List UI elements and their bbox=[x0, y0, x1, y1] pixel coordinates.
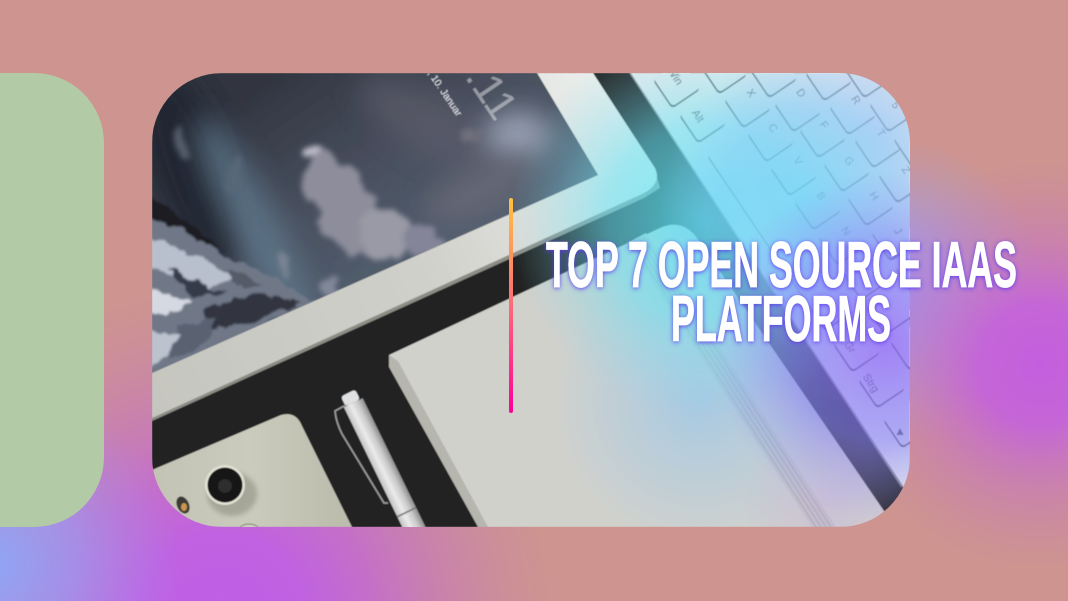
key labels: ▲ bbox=[894, 424, 906, 438]
phone flash bbox=[176, 496, 190, 514]
phone fingerprint sensor bbox=[238, 523, 260, 527]
key labels: Z bbox=[899, 164, 912, 177]
lock-screen clock: 7:11 bbox=[444, 36, 527, 128]
key labels: G bbox=[841, 154, 856, 168]
key labels: D bbox=[793, 87, 808, 100]
panel: rounded desk photo bbox=[152, 73, 910, 527]
key labels bbox=[664, 65, 912, 438]
key labels: 5 bbox=[889, 99, 902, 111]
smartphone bbox=[153, 413, 352, 527]
key labels: Alt bbox=[689, 108, 706, 125]
key labels: N bbox=[838, 225, 853, 238]
key labels: Gr bbox=[841, 339, 858, 356]
key labels: B bbox=[813, 190, 828, 203]
colour gradient overlay bbox=[520, 73, 910, 527]
clouds bbox=[171, 128, 482, 294]
snowy mountain bbox=[152, 197, 313, 372]
key labels: H bbox=[866, 190, 881, 203]
dark sky and light rays bbox=[152, 74, 564, 300]
key labels: F bbox=[817, 119, 830, 132]
key labels: T bbox=[874, 127, 887, 140]
key labels: Strg bbox=[860, 372, 881, 395]
title: PLATFORMS bbox=[671, 282, 891, 355]
title bbox=[546, 228, 1017, 355]
desk surface bbox=[152, 73, 910, 527]
key labels: V bbox=[790, 155, 805, 168]
tablet screen bbox=[152, 73, 598, 373]
lock-screen date: Mittwoch, 10. Januar bbox=[403, 36, 464, 119]
key labels: Win bbox=[664, 65, 685, 88]
key labels: R bbox=[848, 94, 863, 107]
phone camera bbox=[205, 465, 245, 505]
keyboard bbox=[629, 73, 910, 488]
key labels: C bbox=[765, 122, 780, 135]
tablet bbox=[152, 73, 660, 422]
panel: green side block bbox=[0, 73, 104, 527]
key labels: J bbox=[891, 226, 904, 237]
pen bbox=[333, 390, 426, 527]
notebook bbox=[389, 225, 895, 527]
keycaps bbox=[652, 45, 943, 449]
key labels: X bbox=[743, 87, 758, 100]
accent gradient bar bbox=[509, 198, 513, 413]
